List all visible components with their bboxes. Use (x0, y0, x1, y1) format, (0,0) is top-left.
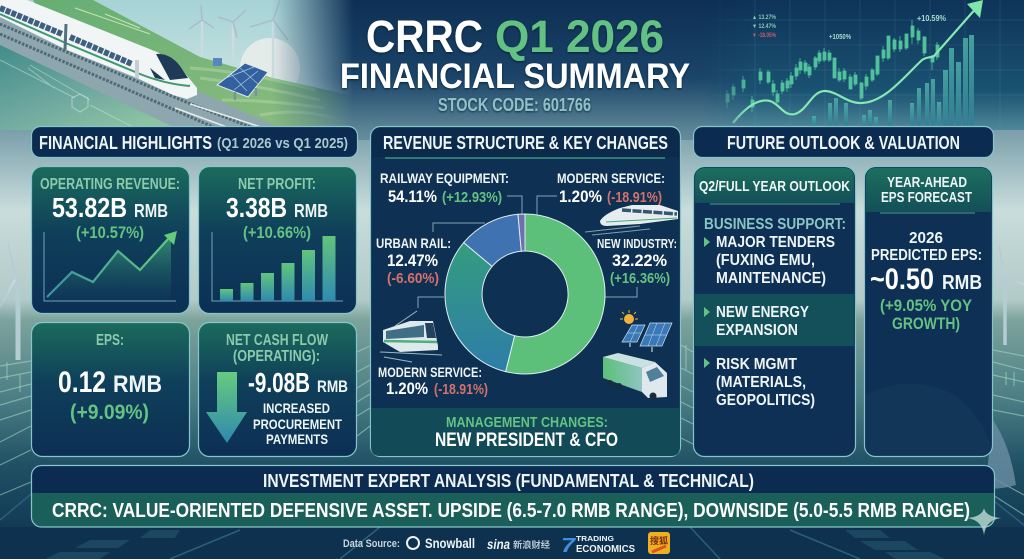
heading: revenue structure: REVENUE STRUCTURE & KEY CHANGES (383, 133, 668, 153)
label: railway equipment: 54.11% (388, 187, 437, 206)
card: net cash flow: PAYMENTS (266, 431, 328, 447)
label: new industry (597, 236, 677, 287)
small hologram icon (72, 94, 88, 112)
header chart scene: +1050% (829, 32, 851, 41)
card: operating revenue: 53.82B (52, 192, 127, 223)
card: net cash flow: RMB (317, 377, 348, 396)
header chart scene: ▲ 13.27% (752, 15, 777, 21)
icon: sun and solar panels (620, 310, 672, 352)
label: railway equipment: RAILWAY EQUIPMENT: (380, 170, 509, 186)
bullet: new energy (704, 304, 809, 339)
icon: down arrow (206, 372, 247, 443)
card: full year outlook: BUSINESS SUPPORT: (704, 216, 846, 233)
label: new industry: 32.22% (612, 251, 667, 270)
panel: investment expert analysis (32, 465, 994, 527)
bullet: major tenders: MAJOR TENDERS (716, 234, 835, 251)
card: eps forecast (864, 166, 992, 456)
heading: financial highlights: (Q1 2026 vs Q1 2025) (217, 135, 348, 152)
card: net profit (198, 166, 356, 314)
card: eps: EPS: (96, 332, 124, 349)
label: railway equipment: (+12.93%) (442, 189, 502, 206)
panel: financial highlights (32, 126, 358, 456)
bullet: risk management: RISK MGMT (716, 356, 797, 373)
logo: yellow badge: 搜狐 (650, 535, 668, 546)
heading: financial highlights: FINANCIAL HIGHLIGHTS (39, 133, 212, 153)
logo: sina: 新浪财经 (513, 539, 550, 550)
card: eps forecast: YEAR-AHEAD (887, 174, 967, 191)
card: net cash flow: PROCUREMENT (253, 416, 342, 432)
bullet: new energy: EXPANSION (716, 322, 798, 339)
green hillside (33, 0, 347, 126)
icon: delivery truck (603, 353, 667, 400)
heading: future outlook (694, 126, 994, 158)
line chart: revenue trend (44, 231, 177, 301)
card: net profit: RMB (294, 201, 328, 221)
label: urban rail: 12.47% (387, 251, 438, 270)
high speed train (0, 0, 197, 99)
card: net profit: (+10.66%) (243, 223, 311, 242)
label: urban rail: URBAN RAIL: (376, 235, 451, 251)
card: net cash flow (198, 322, 356, 456)
card: eps forecast: EPS FORECAST (881, 189, 972, 206)
card: eps (32, 322, 190, 456)
title line one: CRRC (366, 11, 483, 62)
tracks (0, 16, 285, 130)
logo: snowball (407, 535, 475, 551)
label: new industry: (+16.36%) (610, 270, 670, 287)
bullet: major tenders: MAINTENANCE) (716, 270, 826, 287)
label: modern service lower: (-18.91%) (434, 381, 488, 398)
card: eps forecast: GROWTH) (892, 314, 960, 333)
card: eps forecast: PREDICTED EPS: (871, 247, 982, 264)
panel: revenue structure (370, 126, 680, 456)
label: modern service lower: 1.20% (386, 379, 428, 398)
wind turbines (189, 0, 288, 78)
logo: yellow badge (648, 532, 670, 554)
chart value labels: +10.59% (917, 13, 946, 23)
label: modern service lower (378, 364, 488, 398)
stock code: STOCK CODE: 601766 (438, 95, 591, 115)
lower left ground (0, 45, 171, 130)
card: eps forecast: RMB (942, 272, 982, 294)
label: modern service upper (557, 170, 665, 206)
logo: trading economics: 7 (561, 535, 576, 557)
logo: trading economics (561, 534, 635, 557)
logo: trading economics: ECONOMICS (576, 544, 635, 555)
bullet: risk management (704, 356, 815, 409)
donut chart (445, 214, 605, 374)
label: new industry: NEW INDUSTRY: (597, 236, 677, 251)
bullet: major tenders: (FUXING EMU, (716, 252, 815, 269)
connector lines (418, 196, 637, 308)
bar chart: net profit (212, 232, 343, 301)
card: full year outlook: Q2/FULL YEAR OUTLOOK (699, 178, 850, 195)
panel: future outlook (694, 126, 994, 456)
card: net cash flow: NET CASH FLOW (226, 332, 329, 349)
lower-edge wind turbines (0, 243, 1024, 360)
card: net profit: NET PROFIT: (238, 176, 316, 193)
card: operating revenue (32, 166, 190, 314)
title line two: FINANCIAL SUMMARY (340, 57, 690, 96)
card: eps forecast: 2026 (909, 230, 943, 247)
label: modern service lower: MODERN SERVICE: (378, 364, 482, 380)
card: net cash flow: (OPERATING): (233, 348, 320, 365)
high speed train tail at right (985, 420, 1016, 489)
analysis heading: INVESTMENT EXPERT ANALYSIS (FUNDAMENTAL & TECHNICAL) (263, 471, 754, 491)
trend line with arrow (733, 0, 983, 123)
icon: bullet train (585, 205, 678, 235)
callout: management changes: MANAGEMENT CHANGES: (446, 414, 608, 431)
bullet: risk management: (MATERIALS, (716, 374, 806, 391)
label: railway equipment (380, 170, 509, 206)
pale hill behind turbines (240, 38, 300, 83)
card: eps: 0.12 (58, 366, 106, 399)
bullet: risk management: GEOPOLITICS) (716, 392, 815, 409)
title line one (366, 11, 664, 62)
logo: trading economics: TRADING (576, 534, 614, 543)
label: modern service upper: (-18.91%) (607, 189, 662, 206)
card: operating revenue: RMB (134, 201, 168, 221)
heading: future outlook: FUTURE OUTLOOK & VALUATION (727, 133, 960, 153)
icon: sparkle (967, 508, 1001, 535)
label: modern service upper: 1.20% (559, 187, 602, 206)
card: eps forecast: (+9.05% YOY (880, 296, 973, 315)
header chart scene (690, 0, 1024, 130)
label: modern service upper: MODERN SERVICE: (557, 170, 665, 186)
bottom track (0, 527, 1024, 559)
heading: revenue structure (372, 128, 679, 158)
logo: snowball: Snowball (425, 535, 475, 551)
solar panel (217, 63, 268, 97)
footer: data sources: Data Source: (343, 538, 400, 550)
header scene: train and renewable energy (0, 0, 372, 130)
card: net cash flow: INCREASED (263, 400, 330, 416)
card: full year outlook (694, 166, 856, 456)
logo: sina: sina (487, 536, 510, 552)
heading: financial highlights (32, 126, 358, 158)
label: urban rail: (-6.60%) (387, 270, 439, 287)
card: operating revenue: OPERATING REVENUE: (40, 176, 180, 193)
title block (340, 11, 690, 115)
candlesticks (726, 20, 939, 112)
card: eps: RMB (113, 371, 162, 398)
callout: management changes: NEW PRESIDENT & CFO (435, 430, 618, 451)
center title backdrop (272, 0, 750, 140)
label: urban rail (376, 235, 451, 287)
bullet: new energy: NEW ENERGY (716, 304, 809, 321)
title line one: Q1 2026 (495, 11, 664, 62)
card: operating revenue: (+10.57%) (76, 223, 144, 242)
footer: data sources (343, 532, 670, 557)
card: eps forecast: ~0.50 (870, 263, 934, 296)
logo: sina (487, 536, 550, 552)
card: net cash flow: -9.08B (248, 367, 310, 398)
card: eps: (+9.09%) (70, 401, 149, 424)
icon: urban tram (380, 311, 442, 362)
lower rail pattern (0, 345, 1024, 515)
header chart scene: ▼ -18.05% (752, 33, 777, 39)
header chart scene: ▼ 12.47% (752, 24, 777, 30)
callout: management changes (371, 408, 680, 456)
volume bars (812, 35, 974, 127)
bullet: major tenders (704, 234, 835, 287)
card: net profit: 3.38B (226, 192, 287, 223)
